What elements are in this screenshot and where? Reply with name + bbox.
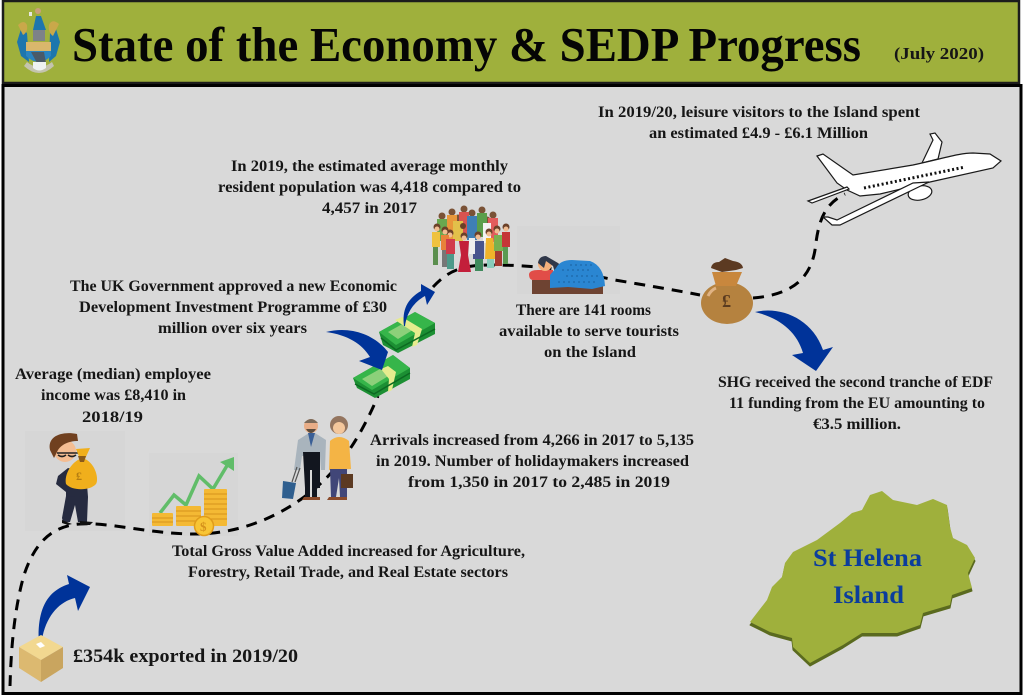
- icon: money bag: [701, 258, 753, 324]
- text: EDF funding: SHG received the second tranche of EDF: [718, 374, 993, 391]
- icon: airplane: [808, 133, 1001, 225]
- text: arrivals: from 1,350 in 2017 to 2,485 in 2019: [408, 474, 670, 491]
- text: arrivals: [370, 432, 694, 491]
- icon: blue arrow from box: [39, 575, 90, 646]
- header banner: [3, 1, 1019, 83]
- text: exports: £354k exported in 2019/20: [73, 646, 298, 667]
- icon: blue arrow to upper money to crowd: [404, 284, 435, 326]
- icon: money bag: £: [722, 291, 731, 311]
- text: rooms: There are 141 rooms: [516, 302, 651, 319]
- text: arrivals: Arrivals increased from 4,266 in 2017 to 5,135: [370, 432, 694, 449]
- text: UK funding: million over six years: [158, 320, 307, 337]
- text: employee income: income was £8,410 in: [41, 387, 186, 404]
- text: employee income: [15, 366, 211, 426]
- map label: St Helena Island: Island: [833, 582, 904, 609]
- icon: growth chart with coins: [152, 457, 234, 536]
- text: leisure spend: an estimated £4.9 - £6.1 Million: [649, 125, 868, 142]
- icon: large blue arrow into money: [326, 330, 388, 370]
- text: EDF funding: [718, 374, 993, 433]
- dashed journey path: [10, 194, 845, 686]
- map label: St Helena Island: [813, 545, 923, 609]
- map label: St Helena Island: St Helena: [813, 545, 923, 572]
- text: EDF funding: €3.5 million.: [813, 416, 901, 433]
- text: UK funding: Development Investment Programme of £30: [79, 299, 387, 316]
- text: leisure spend: In 2019/20, leisure visitors to the Island spent: [598, 104, 921, 121]
- icon: growth chart with coins: $: [200, 519, 207, 534]
- icon: person in bed: [529, 256, 605, 294]
- icon: upper banknote stack: [379, 312, 435, 353]
- icon: cardboard box: [19, 635, 63, 682]
- text: gross value added: Total Gross Value Added increased for Agriculture,: [172, 543, 525, 560]
- text: employee income: 2018/19: [82, 409, 143, 426]
- icon: travelling couple: [282, 416, 353, 500]
- text: UK funding: The UK Government approved a new Economic: [70, 278, 397, 295]
- icon: man carrying money bag: [50, 433, 97, 525]
- text: population: [218, 158, 521, 217]
- text: employee income: Average (median) employee: [15, 366, 211, 383]
- icon: blue arrow from money bag: [755, 311, 833, 371]
- text: rooms: [499, 302, 679, 361]
- decorative image backgrounds: [25, 226, 620, 536]
- map: St Helena island: [750, 491, 975, 666]
- icon: crowd of people: [432, 206, 510, 272]
- text: EDF funding: 11 funding from the EU amounting to: [729, 395, 985, 412]
- icon: lower banknote stack: [353, 355, 410, 398]
- text: gross value added: Forestry, Retail Trade, and Real Estate sectors: [188, 564, 508, 581]
- text: UK funding: [70, 278, 397, 337]
- text: gross value added: [172, 543, 525, 581]
- title: State of the Economy & SEDP Progress: [72, 17, 861, 72]
- text: population: In 2019, the estimated average monthly: [231, 158, 508, 175]
- text: rooms: available to serve tourists: [499, 323, 679, 340]
- text: population: resident population was 4,418 compared to: [218, 179, 521, 196]
- icon: man carrying money bag: £: [76, 469, 82, 483]
- text: leisure spend: [598, 104, 921, 142]
- text: population: 4,457 in 2017: [322, 200, 417, 217]
- text: rooms: on the Island: [544, 344, 636, 361]
- text: arrivals: in 2019. Number of holidaymakers increased: [376, 453, 689, 470]
- icon: coat of arms crest: [17, 8, 60, 73]
- date label: (July 2020): [894, 44, 984, 63]
